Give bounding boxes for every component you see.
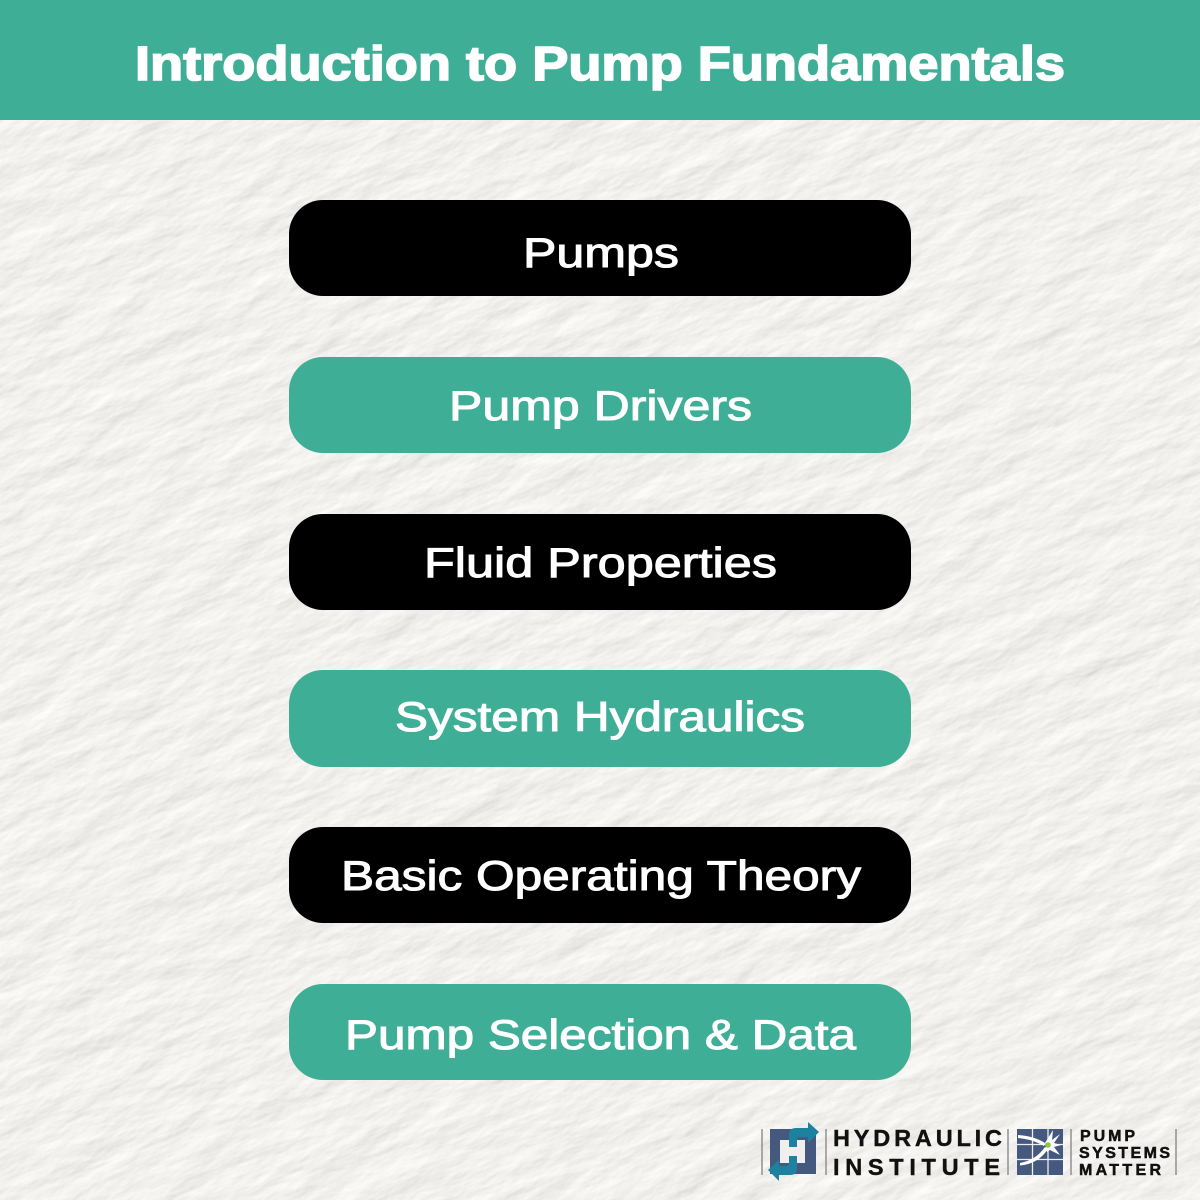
list item: Pumps	[289, 200, 911, 296]
list item: Pumps: Pumps	[523, 229, 679, 276]
list item: Pump Selection & Data: Pump Selection & Data	[345, 1011, 857, 1058]
icon: Hydraulic Institute mark	[768, 1122, 819, 1181]
list item: Fluid Properties	[289, 514, 911, 610]
list item: Fluid Properties: Fluid Properties	[424, 539, 777, 586]
Pump Systems Matter wordmark	[1079, 1128, 1170, 1179]
title: Introduction to Pump Fundamentals	[135, 38, 1065, 91]
Hydraulic Institute wordmark: HYDRAULIC	[833, 1125, 1002, 1151]
Pump Systems Matter wordmark: SYSTEMS	[1079, 1145, 1170, 1162]
Pump Systems Matter wordmark: PUMP	[1080, 1128, 1135, 1145]
Hydraulic Institute wordmark: INSTITUTE	[833, 1154, 1000, 1180]
list item: Pump Selection & Data	[289, 984, 911, 1080]
logo dividers	[762, 1129, 1176, 1175]
list item: Pump Drivers	[289, 357, 911, 453]
list item: System Hydraulics: System Hydraulics	[395, 693, 805, 740]
list item: Pump Drivers: Pump Drivers	[449, 382, 752, 429]
list item: Basic Operating Theory	[289, 827, 911, 923]
list item: System Hydraulics	[289, 670, 911, 767]
list item: Basic Operating Theory: Basic Operating Theory	[341, 852, 861, 899]
Hydraulic Institute wordmark	[833, 1125, 1002, 1180]
header banner	[0, 0, 1200, 120]
Pump Systems Matter wordmark: MATTER	[1079, 1162, 1161, 1179]
logo strip	[762, 1122, 1176, 1181]
icon: Pump Systems Matter mark	[1017, 1129, 1063, 1175]
